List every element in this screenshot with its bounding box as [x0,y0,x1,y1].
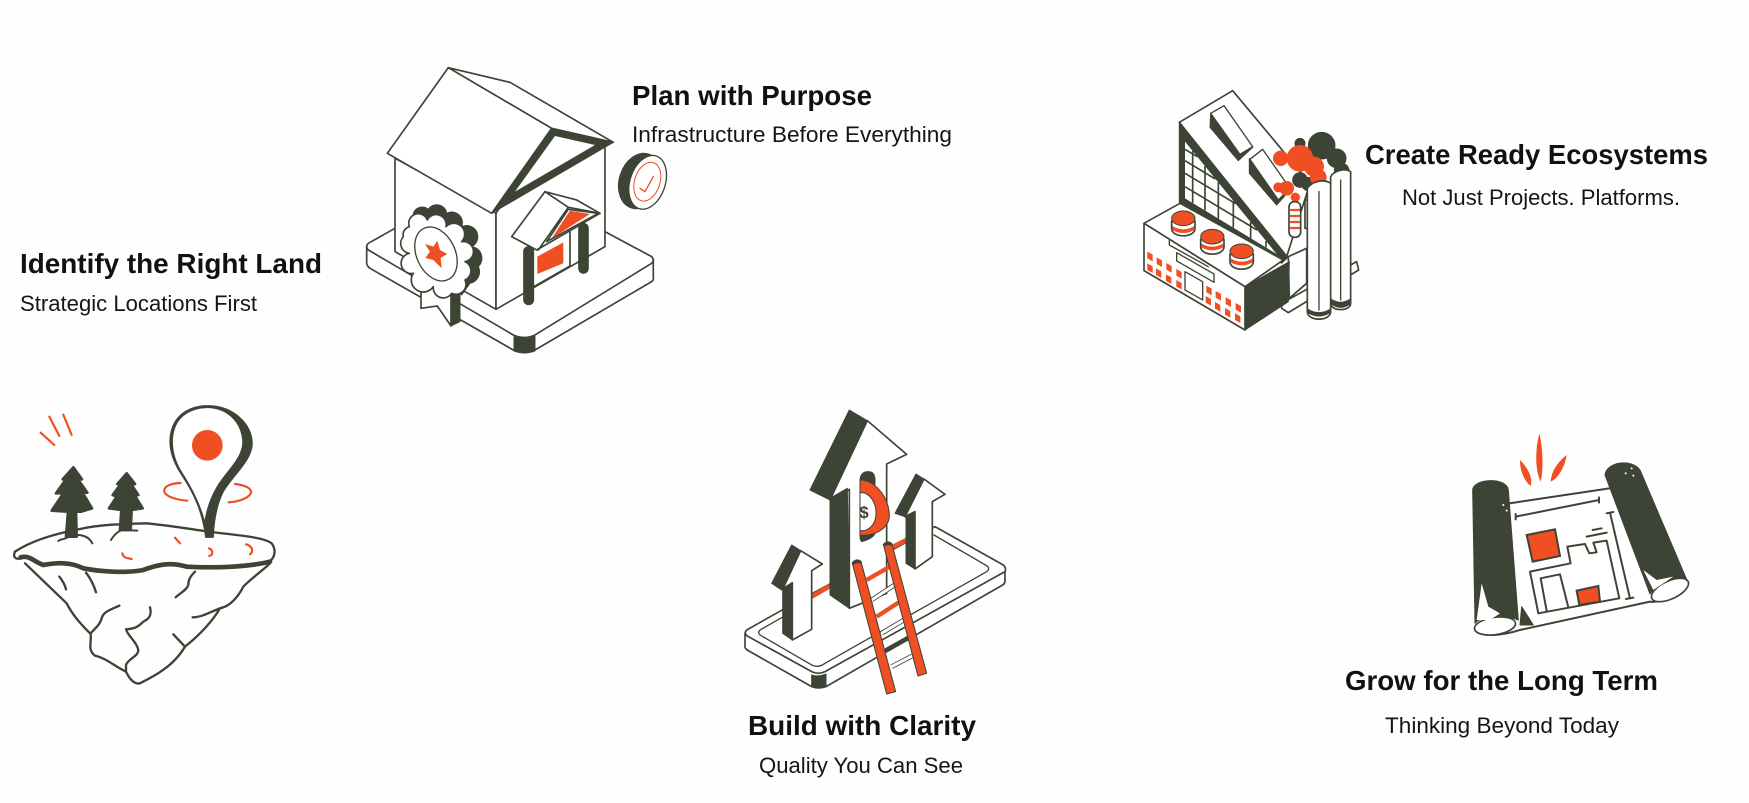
factory base [1144,203,1289,330]
roof tanks [1172,211,1253,269]
orange windows [1147,252,1241,323]
panel: grow for the long term [1345,433,1692,738]
icon: award rosette [401,205,482,326]
big arrow [810,410,907,608]
panel: build with clarity [745,410,1006,778]
icon: dollar coin: $ [859,503,869,522]
subheading: strategic locations first: Strategic Locations First [20,291,257,316]
panel: identify the right land [14,248,322,684]
icon: isometric factory with smoke [1144,91,1359,330]
panel: plan with purpose [367,68,952,353]
heading: plan with purpose: Plan with Purpose [632,80,872,111]
heading: identify the right land: Identify the Right Land [20,248,322,279]
icon: isometric house with award ribbon [367,68,673,353]
small right arrow [895,474,945,569]
chimneys [1289,170,1351,319]
icon: porch door [512,192,600,305]
solar panel two [1249,149,1290,205]
panel: create ready ecosystems [1144,91,1708,330]
icon: growth arrows with coin and ladder [745,410,1006,694]
ladder [852,542,927,694]
small left arrow [772,545,822,640]
subheading: thinking beyond today: Thinking Beyond Today [1385,713,1619,738]
subheading: not just projects platforms: Not Just Projects. Platforms. [1402,185,1680,210]
heading: grow for the long term: Grow for the Long Term [1345,665,1658,696]
icon: blueprint scroll [1473,433,1692,637]
icon: dollar coin [859,472,889,542]
heading: create ready ecosystems: Create Ready Ecosystems [1365,139,1708,170]
smoke [1273,132,1349,202]
solar panel one [1210,106,1253,161]
subheading: infrastructure before everything: Infrastructure Before Everything [632,122,952,147]
heading: build with clarity: Build with Clarity [748,710,976,741]
icon: floating island with trees and location pin [14,406,275,684]
icon: check badge [612,148,673,214]
subheading: quality you can see: Quality You Can See [759,753,963,778]
